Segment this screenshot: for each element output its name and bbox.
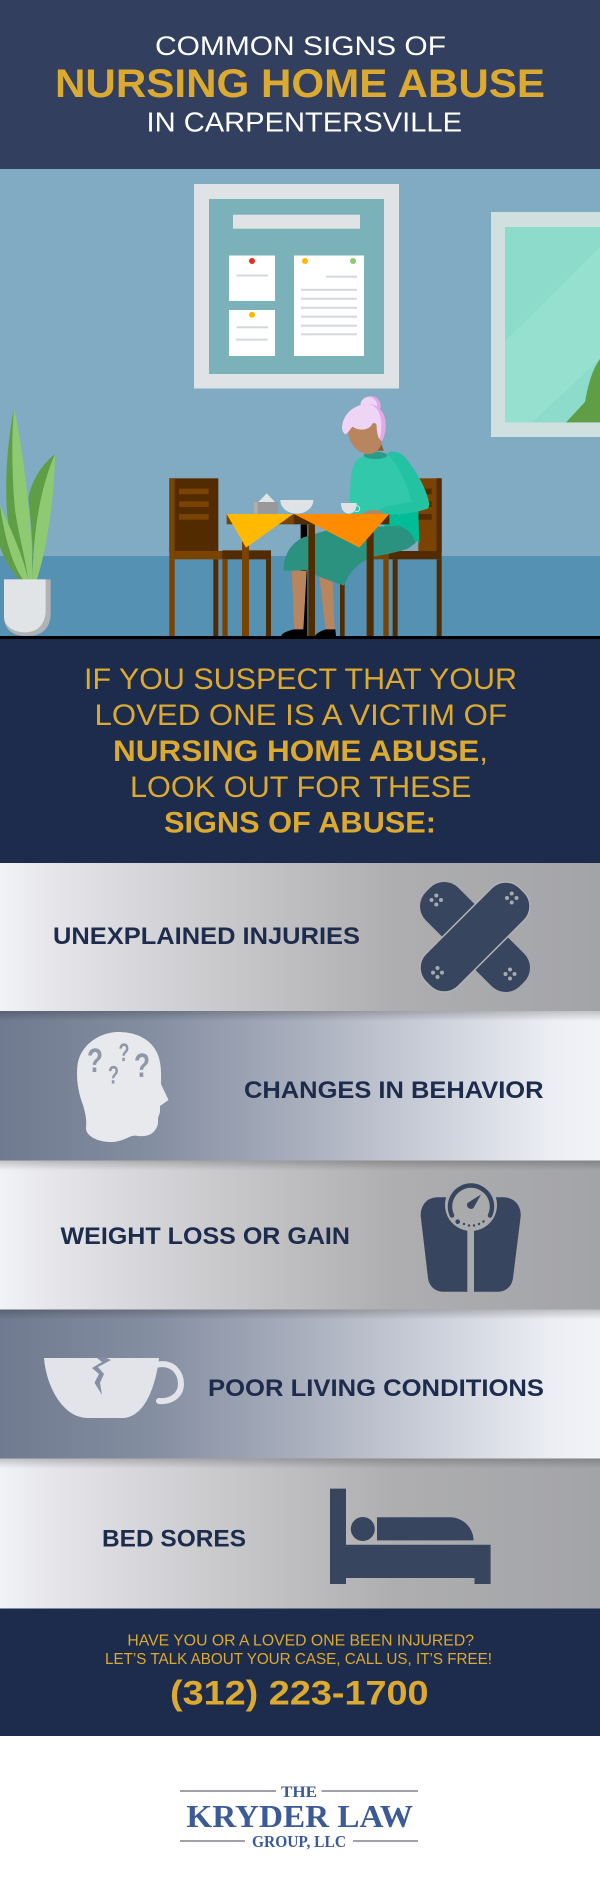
icon: head with question marks: ?	[87, 1042, 103, 1080]
icon: head with question marks	[77, 1032, 168, 1142]
panel: bed sores	[0, 1458, 600, 1608]
table pole	[301, 524, 307, 636]
right chair	[340, 478, 442, 636]
intro line 5: SIGNS OF ABUSE:	[164, 807, 436, 840]
panel: call to action	[0, 1608, 600, 1736]
call to action line 2: LET’S TALK ABOUT YOUR CASE, CALL US, IT’S FREE!	[105, 1651, 492, 1668]
panel: unexplained injuries	[0, 863, 600, 1011]
panel: changes in behavior	[0, 1011, 600, 1160]
panel: header	[0, 0, 600, 169]
label: UNEXPLAINED INJURIES	[53, 923, 360, 950]
table	[227, 514, 389, 636]
icon: cracked cup	[44, 1357, 181, 1418]
icon: head with question marks: ?	[108, 1062, 119, 1090]
logo: the kryder law group	[180, 1784, 418, 1851]
potted plant	[0, 408, 55, 636]
window	[491, 212, 600, 437]
icon: head with question marks: ?	[118, 1039, 130, 1067]
phone number: (312) 223-1700	[170, 1674, 429, 1712]
notice board	[194, 184, 399, 388]
label: BED SORES	[102, 1526, 246, 1553]
panel: illustration of resident at dining table	[0, 169, 600, 639]
intro line 4: LOOK OUT FOR THESE	[130, 771, 472, 804]
label: WEIGHT LOSS OR GAIN	[60, 1223, 350, 1250]
title line: nursing home abuse: NURSING HOME ABUSE	[55, 62, 545, 106]
logo: the kryder law group: THE	[281, 1784, 317, 1801]
napkin holder	[254, 493, 278, 514]
intro line 1: IF YOU SUSPECT THAT YOUR	[84, 663, 517, 696]
label: POOR LIVING CONDITIONS	[208, 1375, 544, 1402]
intro line 3: NURSING HOME ABUSE ,	[113, 735, 488, 768]
title line: in carpentersville: IN CARPENTERSVILLE	[146, 106, 462, 138]
panel: weight loss or gain	[0, 1160, 600, 1310]
resident	[281, 396, 429, 636]
logo: the kryder law group: GROUP, LLC	[252, 1832, 346, 1851]
title line: common signs of: COMMON SIGNS OF	[155, 31, 446, 61]
call to action line 1: HAVE YOU OR A LOVED ONE BEEN INJURED?	[127, 1632, 474, 1650]
table scene	[169, 396, 442, 636]
icon: bathroom scale	[421, 1179, 521, 1292]
teacup	[341, 503, 360, 514]
icon: crossed bandages	[412, 874, 538, 1000]
logo: the kryder law group: KRYDER LAW	[186, 1798, 413, 1834]
icon: person in bed	[330, 1489, 491, 1584]
panel: poor living conditions	[0, 1310, 600, 1458]
intro line 2: LOVED ONE IS A VICTIM OF	[94, 699, 507, 732]
icon: head with question marks: ?	[134, 1047, 150, 1085]
panel: intro text	[0, 639, 600, 863]
left chair	[169, 478, 271, 636]
label: CHANGES IN BEHAVIOR	[244, 1077, 544, 1104]
bowl	[280, 500, 313, 514]
